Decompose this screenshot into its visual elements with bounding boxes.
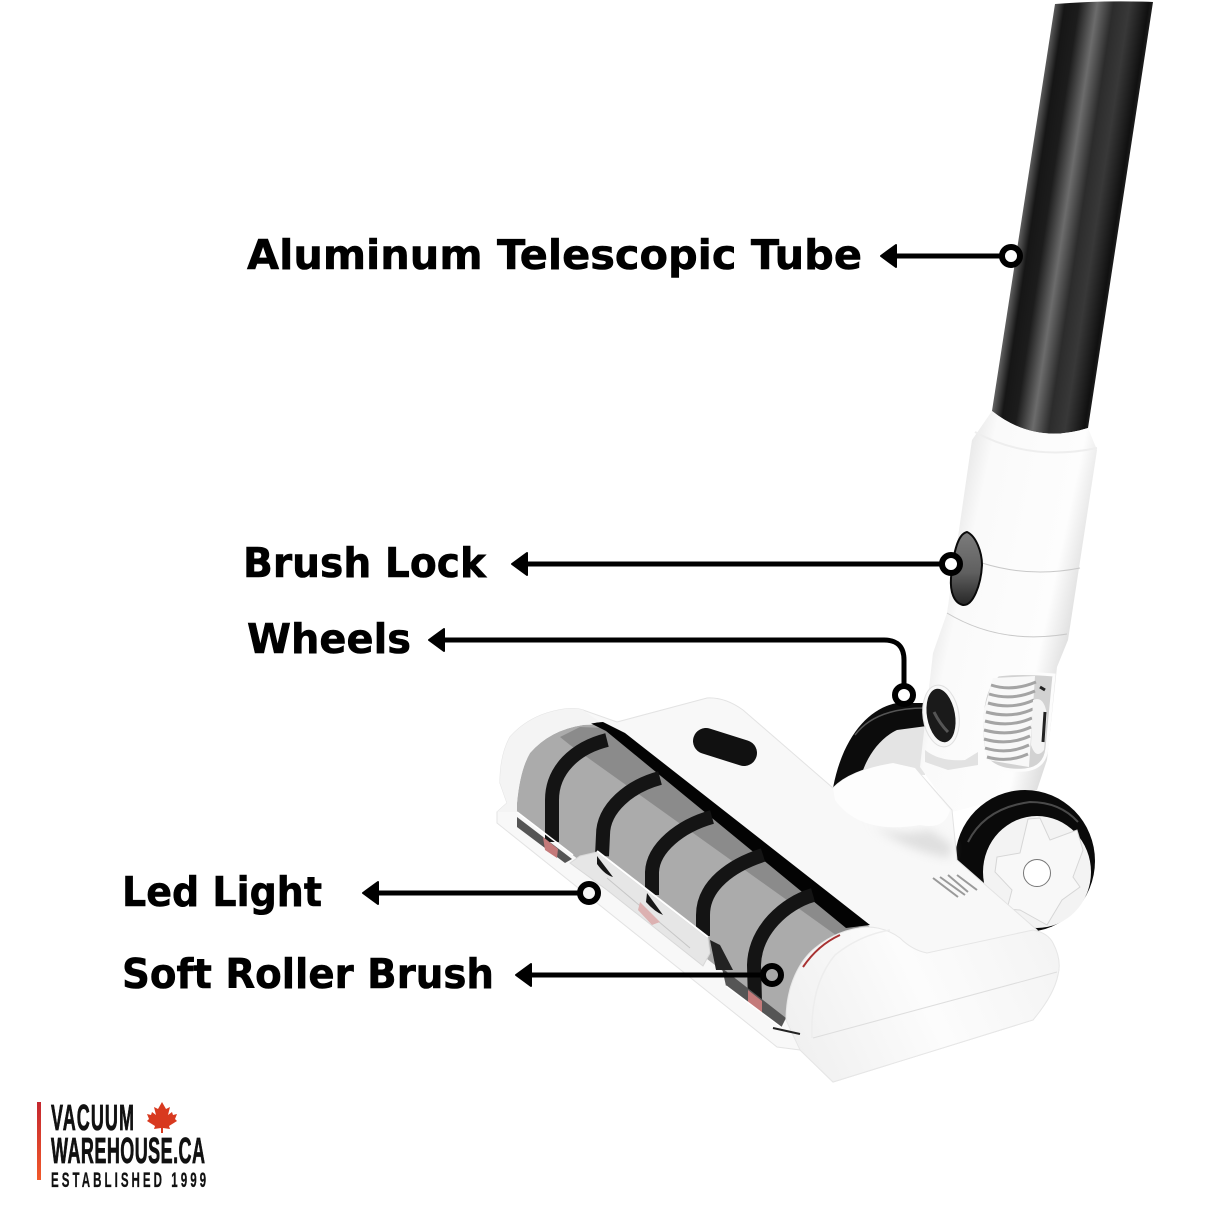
callout: Brush Lock — [243, 539, 960, 587]
aluminum telescopic tube — [992, 1, 1153, 434]
callout: Led Light: Led Light — [122, 868, 322, 916]
roller shaded band — [560, 727, 860, 938]
callout: Soft Roller Brush: Soft Roller Brush — [122, 950, 494, 998]
callout: Wheels — [247, 615, 913, 704]
pointer arrow: brush lock — [512, 553, 960, 575]
joint bulge — [833, 763, 950, 827]
clear front cover with led light — [570, 851, 733, 970]
logo wordmark line 1: VACUUM — [51, 1098, 134, 1139]
roller brush — [517, 722, 870, 1028]
logo accent bar — [37, 1102, 41, 1180]
lower dark strip left — [517, 817, 572, 863]
pointer arrow: soft roller brush — [516, 964, 781, 986]
front wheel — [955, 790, 1095, 932]
lower dark strip right — [722, 968, 786, 1028]
callout: Brush Lock: Brush Lock — [243, 539, 488, 587]
display panel — [706, 741, 744, 753]
black top band — [590, 722, 870, 928]
callout: Aluminum Telescopic Tube: Aluminum Telescopic Tube — [247, 231, 862, 279]
icon: maple leaf — [147, 1102, 177, 1133]
left end cap — [497, 709, 600, 812]
brush lock button — [951, 532, 982, 605]
pivot button — [919, 683, 963, 749]
roller stripes — [552, 740, 813, 1002]
flexible hose spring — [982, 674, 1054, 770]
callout: Soft Roller Brush — [122, 950, 781, 998]
wheel hub star — [995, 818, 1083, 925]
vent slits — [933, 875, 977, 897]
callout: Led Light — [122, 868, 598, 916]
pointer arrow: wheels — [429, 629, 913, 704]
body joint shading — [860, 815, 952, 858]
floor head body — [497, 698, 1059, 1082]
product: vacuum tube and floor head — [497, 1, 1153, 1082]
rear wheel — [833, 703, 927, 790]
logo: Vacuum Warehouse.ca — [37, 1098, 206, 1192]
logo wordmark line 2: WAREHOUSE.CA — [51, 1131, 205, 1172]
right end cover — [773, 927, 1059, 1082]
pointer arrow: tube — [881, 245, 1020, 267]
white tube neck — [919, 411, 1097, 812]
pointer arrow: led light — [363, 882, 598, 904]
logo tagline: ESTABLISHED 1999 — [51, 1168, 206, 1192]
pivot shading — [925, 750, 978, 770]
callout: Wheels: Wheels — [247, 615, 411, 663]
